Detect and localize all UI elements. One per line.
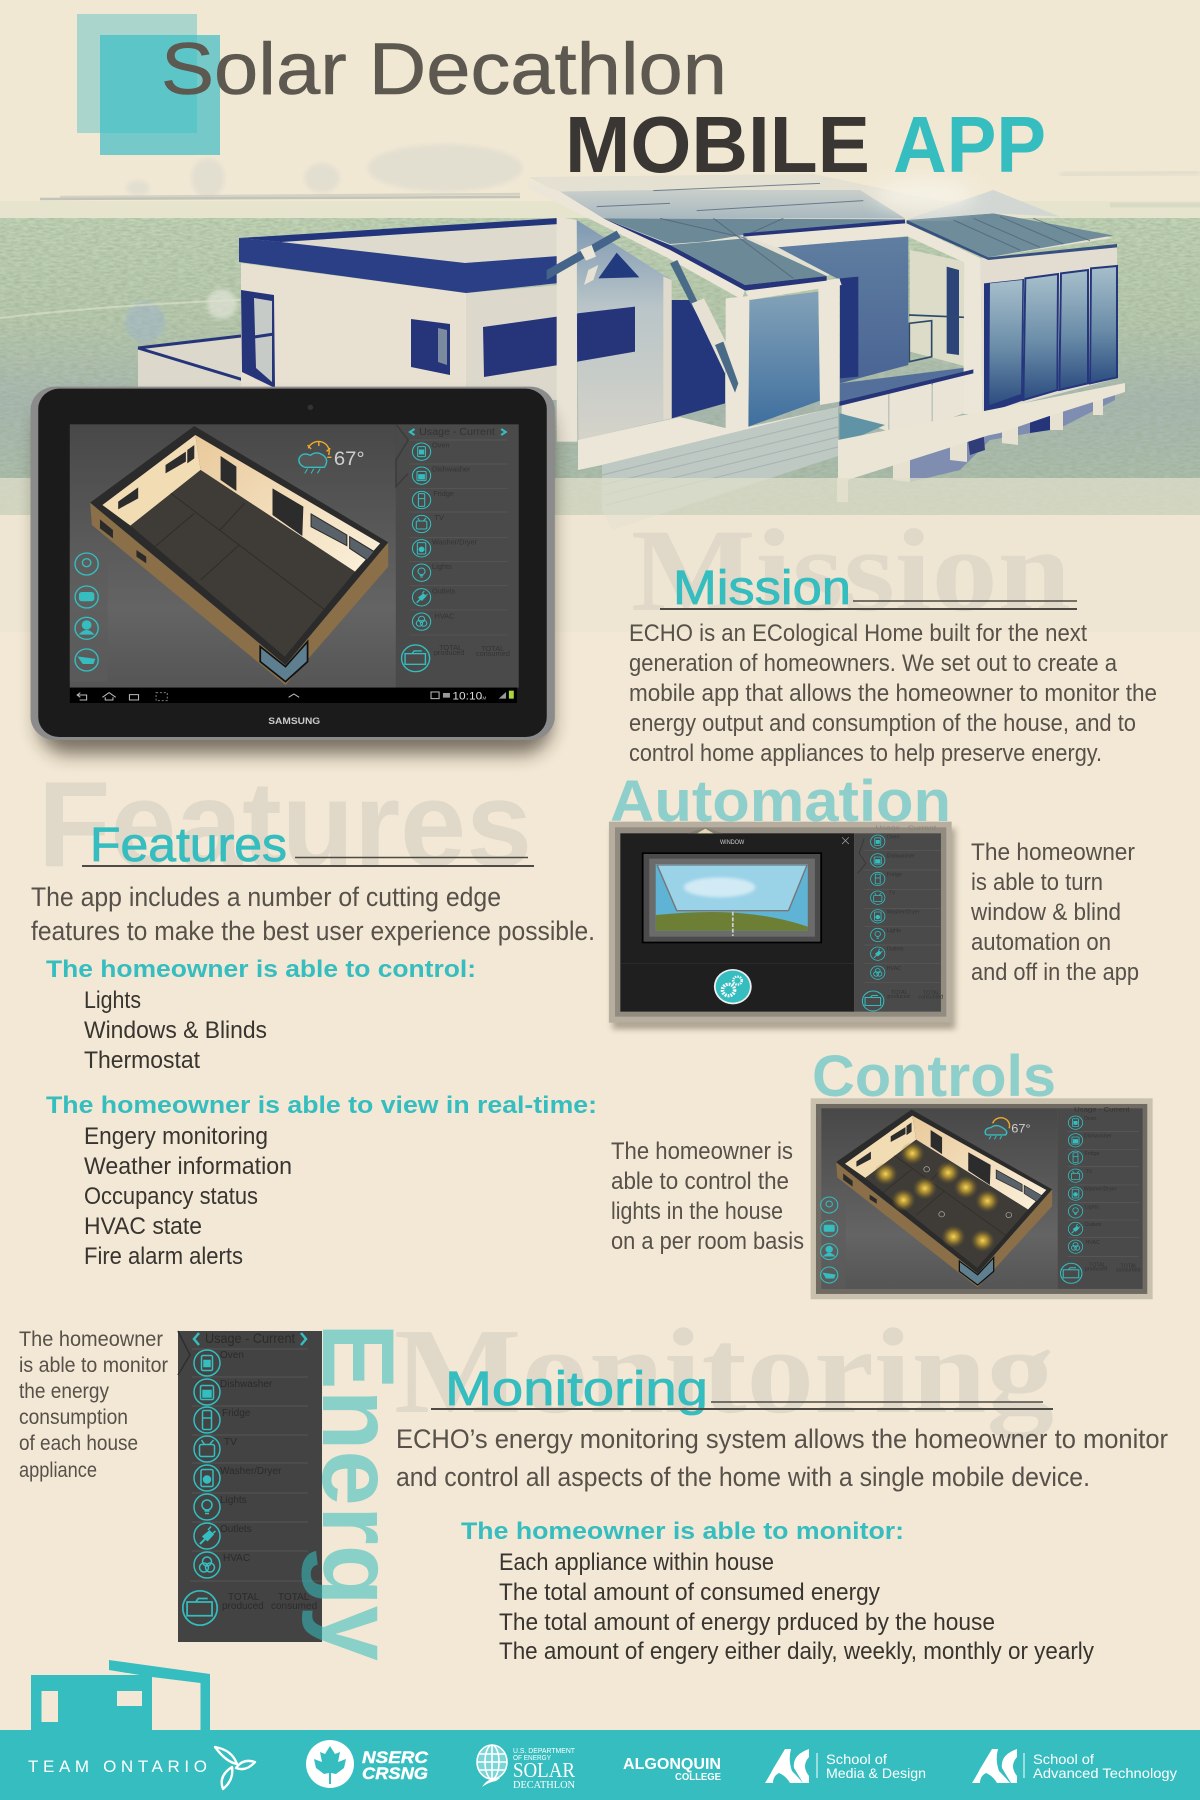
monitoring intro text: ECHO’s energy monitoring system allows the homeowner to monitor xyxy=(396,1424,1168,1454)
mission text: mobile app that allows the homeowner to monitor the xyxy=(629,680,1157,707)
energy usage panel: TOTAL xyxy=(228,1592,260,1603)
real-time list: Engery monitoring xyxy=(84,1123,268,1150)
tablet shadow xyxy=(38,402,552,754)
energy usage panel: Oven xyxy=(220,1350,244,1361)
energy description: is able to monitor xyxy=(19,1354,168,1377)
left menu xyxy=(70,543,108,682)
side panel: Oven xyxy=(1084,1116,1097,1122)
ghost heading: Monitoring: Monitoring xyxy=(394,1304,1054,1439)
side panel: Outlets xyxy=(887,947,904,953)
monitor list: Each appliance within house xyxy=(499,1549,774,1576)
heading: Mission: Mission xyxy=(673,562,851,615)
faded lower photo bands xyxy=(0,478,1200,632)
monitor list: The total amount of consumed energy xyxy=(499,1579,880,1606)
weather xyxy=(299,441,365,473)
energy usage panel: consumed xyxy=(271,1601,317,1612)
heading: Automation: Automation xyxy=(610,769,951,834)
side panel: Washer/Dryer xyxy=(1084,1186,1117,1192)
logo: AC School of Media & Design xyxy=(765,1749,926,1783)
side panel: Fridge xyxy=(887,872,902,878)
deck, boards and stilts xyxy=(578,383,1125,530)
side panel: Fridge xyxy=(433,490,454,498)
logo: Algonquin College: COLLEGE xyxy=(675,1772,721,1783)
real-time list: HVAC state xyxy=(84,1213,202,1240)
logo: Team Ontario: TEAM ONTARIO xyxy=(28,1757,210,1776)
side panel: TV xyxy=(888,891,896,897)
automation screenshot xyxy=(609,822,955,1029)
balcony xyxy=(842,393,888,432)
energy usage panel xyxy=(178,1330,322,1642)
logo: AC School of Media & Design: Media & Design xyxy=(826,1765,926,1781)
logo: U.S. DOE Solar Decathlon xyxy=(477,1745,576,1791)
house photograph xyxy=(138,174,1125,530)
side panel: Washer/Dryer xyxy=(432,538,478,546)
side panel: Oven xyxy=(432,442,450,450)
heading: Monitoring: Monitoring xyxy=(445,1363,708,1416)
status bar: AM xyxy=(479,695,487,700)
title: Solar Decathlon xyxy=(161,29,727,110)
mission text: generation of homeowners. We set out to create a xyxy=(629,650,1118,677)
window illustration xyxy=(642,852,822,943)
monitor list: The total amount of energy prduced by the house xyxy=(499,1609,995,1636)
automation description: is able to turn xyxy=(971,869,1103,896)
side panel: Outlets xyxy=(432,587,456,595)
tablet with app home screen xyxy=(31,387,555,740)
heading: Features: Features xyxy=(90,819,287,872)
controls description: on a per room basis xyxy=(611,1228,804,1255)
status bar: 10:10 xyxy=(452,690,483,702)
logo: NSERC CRSNG: NSERC xyxy=(362,1748,429,1767)
features intro text: The app includes a number of cutting edge xyxy=(31,882,501,912)
control list: Windows & Blinds xyxy=(84,1017,267,1044)
automation description xyxy=(970,839,1139,986)
automation description: The homeowner xyxy=(971,839,1135,866)
braces xyxy=(670,260,698,307)
energy description xyxy=(19,1328,168,1482)
controls description: lights in the house xyxy=(611,1198,783,1225)
side panel: Usage - Current xyxy=(876,825,937,832)
energy usage panel: Usage - Current xyxy=(205,1330,295,1346)
automation description: and off in the app xyxy=(971,959,1139,986)
energy usage panel: Outlets xyxy=(220,1524,252,1535)
logo: AC School of Advanced Technology xyxy=(972,1749,1177,1783)
control list: Thermostat xyxy=(84,1047,200,1074)
features intro text: features to make the best user experience possible. xyxy=(31,916,595,946)
energy usage panel: Washer/Dryer xyxy=(220,1466,282,1477)
side panel: consumed xyxy=(918,995,943,1001)
side panel: TOTAL xyxy=(891,990,908,996)
logo: AC School of Advanced Technology: Advanced Technology xyxy=(1033,1765,1177,1781)
controls screenshot xyxy=(811,1098,1153,1299)
side panel: TOTAL xyxy=(1089,1263,1106,1269)
ghost heading: Features: Features xyxy=(38,756,532,892)
side panel: produced xyxy=(434,649,464,657)
side panel: TV xyxy=(1086,1169,1093,1175)
monitoring intro text: and control all aspects of the home with a single mobile device. xyxy=(396,1462,1090,1492)
side panel: TOTAL xyxy=(1121,1263,1137,1269)
logo: U.S. DOE Solar Decathlon: OF ENERGY xyxy=(513,1755,551,1762)
side panel: TOTAL xyxy=(481,645,504,653)
logo: Team Ontario xyxy=(28,1747,255,1789)
automation description: window & blind xyxy=(970,899,1121,926)
heading: Energy (vertical): Energy xyxy=(301,1323,415,1661)
weather: 67° xyxy=(1011,1122,1031,1136)
features intro text xyxy=(31,882,595,946)
controls description: able to control the xyxy=(611,1168,789,1195)
automation description: automation on xyxy=(971,929,1111,956)
side panel: HVAC xyxy=(887,966,901,972)
brand: SAMSUNG xyxy=(268,716,320,726)
controls description: The homeowner is xyxy=(611,1138,793,1165)
title: MOBILE xyxy=(565,100,870,189)
side panel: Lights xyxy=(1084,1204,1099,1210)
real-time list: Occupancy status xyxy=(84,1183,258,1210)
energy usage panel: Fridge xyxy=(222,1408,251,1419)
real-time list xyxy=(46,1092,597,1270)
side panel: Dishwasher xyxy=(1084,1134,1112,1140)
room lights xyxy=(873,1142,1012,1252)
control list xyxy=(46,956,476,1074)
mission text xyxy=(629,620,1157,767)
side panel: Lights xyxy=(432,563,452,571)
side panel: Outlets xyxy=(1084,1222,1102,1228)
centre and right sections, drawn in crop coordinates xyxy=(528,174,1117,445)
logo: AC School of Advanced Technology: School of xyxy=(1033,1751,1094,1767)
energy description: of each house xyxy=(19,1432,138,1455)
side panel xyxy=(858,825,943,1011)
side panel: Fridge xyxy=(1084,1151,1100,1157)
monitoring intro text xyxy=(396,1424,1168,1492)
energy description: appliance xyxy=(19,1459,97,1482)
side panel: Usage - Current xyxy=(419,426,495,438)
status bar xyxy=(70,688,517,703)
monitor list: The homeowner is able to monitor: xyxy=(461,1518,904,1545)
house logo xyxy=(31,1660,210,1730)
logo: NSERC CRSNG: CRSNG xyxy=(362,1764,428,1783)
side panel: TOTAL xyxy=(923,991,940,997)
side panel: Dishwasher xyxy=(887,853,915,859)
energy usage panel: Lights xyxy=(220,1495,247,1506)
side panel: Usage - Current xyxy=(1074,1106,1130,1113)
side panel: Washer/Dryer xyxy=(887,909,920,915)
automation screenshot: WINDOW xyxy=(720,839,744,846)
side panel: produced xyxy=(887,994,910,1000)
left box xyxy=(138,218,640,400)
app screen xyxy=(70,424,396,688)
real-time list: The homeowner is able to view in real-time: xyxy=(46,1092,597,1119)
mission text: control home appliances to help preserve energy. xyxy=(629,740,1102,767)
logo: Algonquin College: ALGONQUIN xyxy=(623,1756,721,1773)
title xyxy=(161,29,1046,189)
energy usage panel: Dishwasher xyxy=(220,1379,273,1390)
side panel: Oven xyxy=(887,835,900,841)
title: APP xyxy=(893,100,1046,189)
control list: The homeowner is able to control: xyxy=(46,956,476,983)
real-time list: Fire alarm alerts xyxy=(84,1243,243,1270)
energy usage panel: HVAC xyxy=(223,1553,250,1564)
side panel: TOTAL xyxy=(439,644,462,652)
footer band xyxy=(0,1730,1200,1800)
gear button xyxy=(714,969,752,1004)
logo: AC School of Media & Design: School of xyxy=(826,1751,887,1767)
weather: 67° xyxy=(334,448,365,470)
energy description: consumption xyxy=(19,1406,128,1429)
monitor list xyxy=(461,1518,1094,1665)
side panel: consumed xyxy=(1116,1267,1141,1273)
side panel: Dishwasher xyxy=(432,466,471,474)
photo background: sky, trees and field xyxy=(0,0,1200,515)
side panel: consumed xyxy=(476,650,510,658)
heading: Controls: Controls xyxy=(812,1044,1056,1109)
ghost heading: Mission: Mission xyxy=(631,505,1071,636)
logo: U.S. DOE Solar Decathlon: U.S. DEPARTMENT xyxy=(513,1748,576,1755)
controls description xyxy=(611,1138,804,1255)
side panel xyxy=(1058,1106,1143,1289)
mission text: ECHO is an ECological Home built for the next xyxy=(629,620,1087,647)
control list: Lights xyxy=(84,987,141,1014)
energy usage panel: produced xyxy=(222,1601,264,1612)
energy description: the energy xyxy=(19,1380,109,1403)
monitor list: The amount of engery either daily, weekly, monthly or yearly xyxy=(499,1638,1094,1665)
logo: NSERC CRSNG xyxy=(306,1740,429,1788)
solar roof xyxy=(560,190,905,218)
side panel: HVAC xyxy=(435,612,454,620)
logo: U.S. DOE Solar Decathlon: DECATHLON xyxy=(513,1780,575,1791)
left menu xyxy=(821,1188,846,1289)
energy description: The homeowner xyxy=(19,1328,163,1351)
logo: U.S. DOE Solar Decathlon: SOLAR xyxy=(513,1758,575,1782)
real-time list: Weather information xyxy=(84,1153,292,1180)
side panel: Lights xyxy=(887,928,901,934)
teal squares behind title xyxy=(77,14,220,155)
energy usage panel: TV xyxy=(224,1437,237,1448)
side panel: produced xyxy=(1085,1267,1107,1273)
side panel xyxy=(396,424,519,688)
mission text: energy output and consumption of the house, and to xyxy=(629,710,1136,737)
logo: Algonquin College xyxy=(623,1756,721,1783)
side panel: TV xyxy=(435,514,444,522)
energy usage panel: TOTAL xyxy=(278,1592,310,1603)
side panel: HVAC xyxy=(1086,1240,1100,1246)
weather xyxy=(985,1118,1031,1139)
